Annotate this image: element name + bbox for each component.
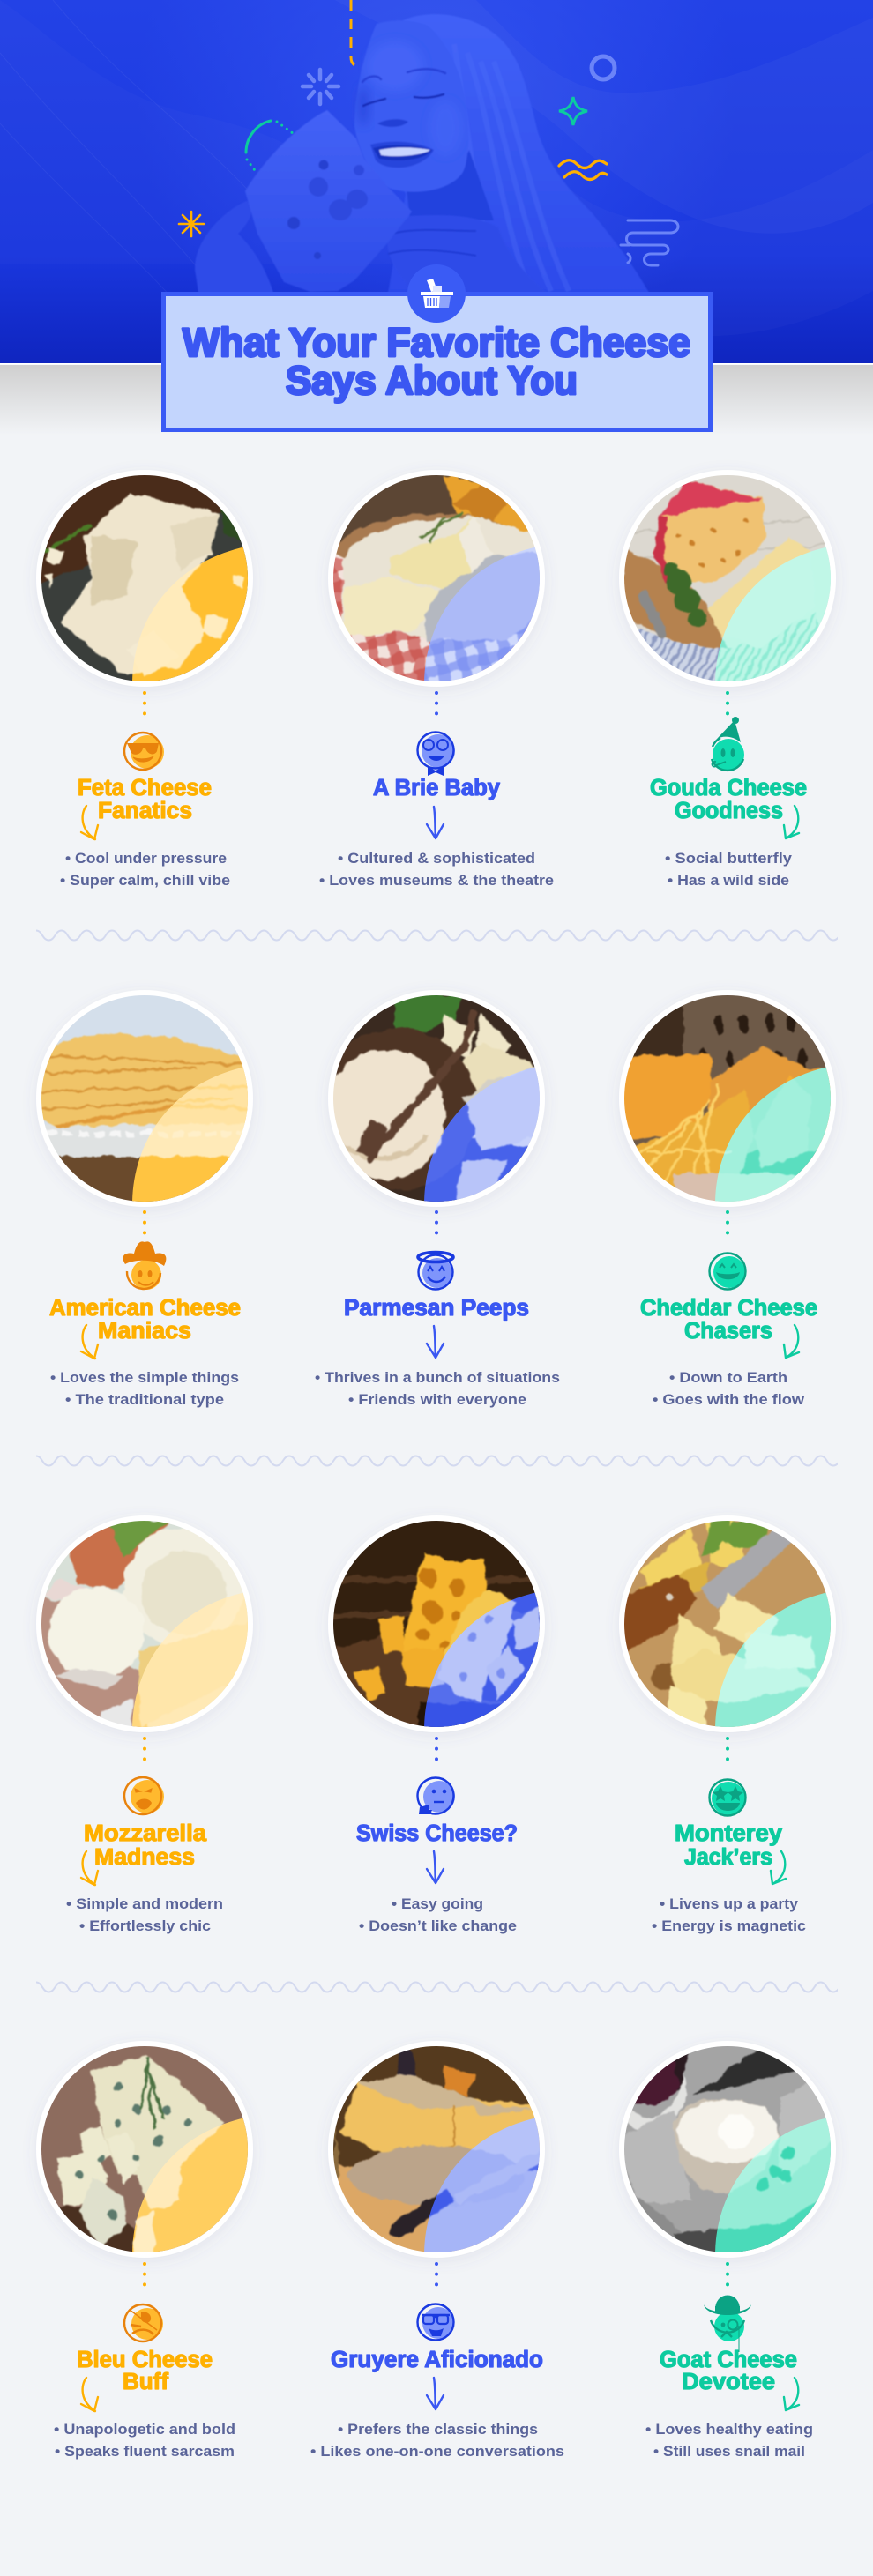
heading	[660, 2348, 797, 2394]
traits: • Social butterfly	[665, 851, 793, 867]
connector dots	[726, 2264, 729, 2295]
heading: Feta Cheese	[78, 776, 212, 800]
traits: • Still uses snail mail	[653, 2444, 805, 2460]
panel: gruyere	[310, 2035, 564, 2460]
traits	[665, 851, 793, 889]
traits	[310, 2422, 564, 2460]
icon: kissing emoji	[124, 1777, 164, 1814]
photo: goat	[613, 2035, 842, 2264]
hero background	[0, 0, 873, 436]
traits: • Energy is magnetic	[652, 1918, 806, 1934]
traits: • Cool under pressure	[65, 851, 227, 867]
connector dots	[435, 2264, 438, 2295]
heading	[77, 2348, 213, 2394]
heading	[650, 776, 807, 823]
icon: teal sparkle	[559, 97, 587, 125]
heading: Mozzarella	[84, 1821, 207, 1846]
heading: Maniacs	[98, 1319, 191, 1344]
panel: brie	[319, 464, 554, 889]
connector dots	[726, 1738, 729, 1769]
heading: Cheddar Cheese	[640, 1296, 817, 1321]
icon: eye patch emoji	[124, 2304, 163, 2341]
traits	[60, 851, 230, 889]
heading: Bleu Cheese	[77, 2348, 213, 2372]
illustration: cheese wedge	[245, 110, 412, 292]
heading: Chasers	[684, 1319, 772, 1344]
heading: American Cheese	[49, 1296, 241, 1321]
icon: thinking emoji	[418, 1777, 455, 1814]
panel: feta cheese	[30, 464, 259, 889]
photo: bleu	[30, 2035, 259, 2264]
icon: grinning emoji	[709, 1254, 746, 1289]
connector dots	[435, 1212, 438, 1243]
panel: bleu cheese	[30, 2035, 259, 2460]
icon: star eyes emoji	[709, 1779, 746, 1816]
icon: lavender cloud lines	[621, 220, 678, 265]
arrow	[81, 2378, 98, 2411]
traits: • Loves the simple things	[50, 1370, 239, 1386]
traits: • Speaks fluent sarcasm	[55, 2444, 235, 2460]
traits	[315, 1370, 560, 1408]
traits	[50, 1370, 239, 1408]
traits: • Thrives in a bunch of situations	[315, 1370, 560, 1386]
heading	[49, 1296, 241, 1344]
heading: Goodness	[675, 799, 783, 823]
icon: lavender ring	[592, 56, 615, 79]
photo: cheddar	[613, 984, 842, 1213]
icon: teal dotted arc	[246, 121, 296, 173]
arrow	[784, 2378, 799, 2410]
heading	[84, 1821, 207, 1870]
photo: brie	[322, 464, 551, 693]
heading: Madness	[94, 1845, 195, 1870]
connector dots	[726, 693, 729, 724]
heading: Gruyere Aficionado	[331, 2348, 543, 2372]
photo: parmesan	[328, 990, 545, 1208]
heading	[78, 776, 212, 823]
illustration: woman with long hair	[354, 14, 649, 293]
icon: orange asterisk	[179, 212, 204, 236]
traits	[54, 2422, 235, 2460]
panel: swiss	[322, 1509, 551, 1934]
heading: Devotee	[682, 2370, 775, 2394]
arrow	[784, 806, 799, 838]
traits: • The traditional type	[65, 1392, 224, 1408]
icon: shopping basket badge	[407, 264, 466, 323]
connector dots	[143, 1212, 146, 1243]
illustration: hands	[195, 201, 547, 293]
icon: orange dashed line	[351, 0, 362, 67]
heading: Goat Cheese	[660, 2348, 797, 2372]
heading: Jack’ers	[684, 1845, 772, 1870]
panel: goat cheese	[613, 2035, 842, 2460]
heading: Monterey	[675, 1821, 783, 1846]
traits: • Cultured & sophisticated	[338, 851, 535, 867]
traits	[645, 2422, 813, 2460]
traits	[653, 1370, 804, 1408]
arrow	[81, 1851, 98, 1885]
traits: • Goes with the flow	[653, 1392, 804, 1408]
icon: angel halo emoji	[418, 1252, 453, 1289]
heading	[675, 1821, 783, 1870]
panel: hero header	[0, 0, 873, 436]
arrow	[427, 1851, 444, 1883]
traits: • Prefers the classic things	[338, 2422, 538, 2438]
connector dots	[435, 693, 438, 724]
photo: american	[30, 984, 259, 1213]
title: What Your Favorite Cheese	[183, 320, 690, 365]
icon: orange waves	[559, 160, 607, 180]
icon: cowboy emoji	[123, 1241, 166, 1290]
title: Says About You	[286, 358, 578, 403]
arrow	[81, 1325, 98, 1359]
traits: • Unapologetic and bold	[54, 2422, 235, 2438]
photo: feta	[30, 464, 259, 693]
traits: • Likes one-on-one conversations	[310, 2444, 564, 2460]
photo: gruyere	[322, 2035, 551, 2264]
traits	[359, 1896, 517, 1934]
panel: cheddar	[613, 984, 842, 1408]
icon: sunglasses emoji	[124, 733, 164, 770]
connector dots	[143, 2264, 146, 2295]
arrow	[81, 806, 98, 839]
heading: A Brie Baby	[373, 776, 501, 800]
traits: • Loves museums & the theatre	[319, 873, 554, 889]
panel: american cheese	[30, 984, 259, 1408]
icon: nerd glasses emoji	[418, 2304, 454, 2340]
arrow	[427, 807, 444, 838]
heading: Parmesan Peeps	[344, 1296, 529, 1321]
heading: Buff	[123, 2370, 169, 2394]
panel: monterey jack	[613, 1509, 842, 1934]
traits: • Friends with everyone	[348, 1392, 526, 1408]
heading	[640, 1296, 817, 1344]
icon: party hat emoji	[712, 717, 744, 771]
traits: • Easy going	[392, 1896, 483, 1912]
title box	[164, 294, 711, 430]
heading: Gouda Cheese	[650, 776, 807, 800]
photo: gouda	[613, 464, 842, 693]
icon: lavender burst	[302, 70, 339, 104]
traits	[652, 1896, 806, 1934]
arrow	[784, 1325, 799, 1358]
traits: • Doesn’t like change	[359, 1918, 517, 1934]
traits	[66, 1896, 223, 1934]
connector dots	[726, 1212, 729, 1243]
connector dots	[143, 693, 146, 724]
traits: • Super calm, chill vibe	[60, 873, 230, 889]
traits: • Effortlessly chic	[79, 1918, 211, 1934]
traits: • Down to Earth	[669, 1370, 787, 1386]
photo: swiss	[322, 1509, 551, 1738]
photo: mozzarella	[30, 1509, 259, 1738]
traits: • Simple and modern	[66, 1896, 223, 1912]
heading: Fanatics	[98, 799, 192, 823]
panel: mozzarella	[30, 1509, 259, 1934]
panel: parmesan	[315, 984, 560, 1408]
arrow	[427, 1326, 444, 1358]
arrow	[771, 1851, 786, 1884]
icon: nerdy winking emoji with bow tie	[418, 732, 455, 776]
traits: • Loves healthy eating	[645, 2422, 813, 2438]
connector dots	[435, 1738, 438, 1769]
panel: gouda	[613, 464, 842, 889]
arrow	[427, 2378, 444, 2409]
traits: • Livens up a party	[660, 1896, 799, 1912]
heading: Swiss Cheese?	[356, 1821, 518, 1846]
connector dots	[143, 1738, 146, 1769]
traits	[319, 851, 554, 889]
title	[183, 320, 690, 403]
photo: monterey	[613, 1509, 842, 1738]
traits: • Has a wild side	[668, 873, 789, 889]
icon: monocle and bowler hat emoji	[704, 2296, 751, 2352]
